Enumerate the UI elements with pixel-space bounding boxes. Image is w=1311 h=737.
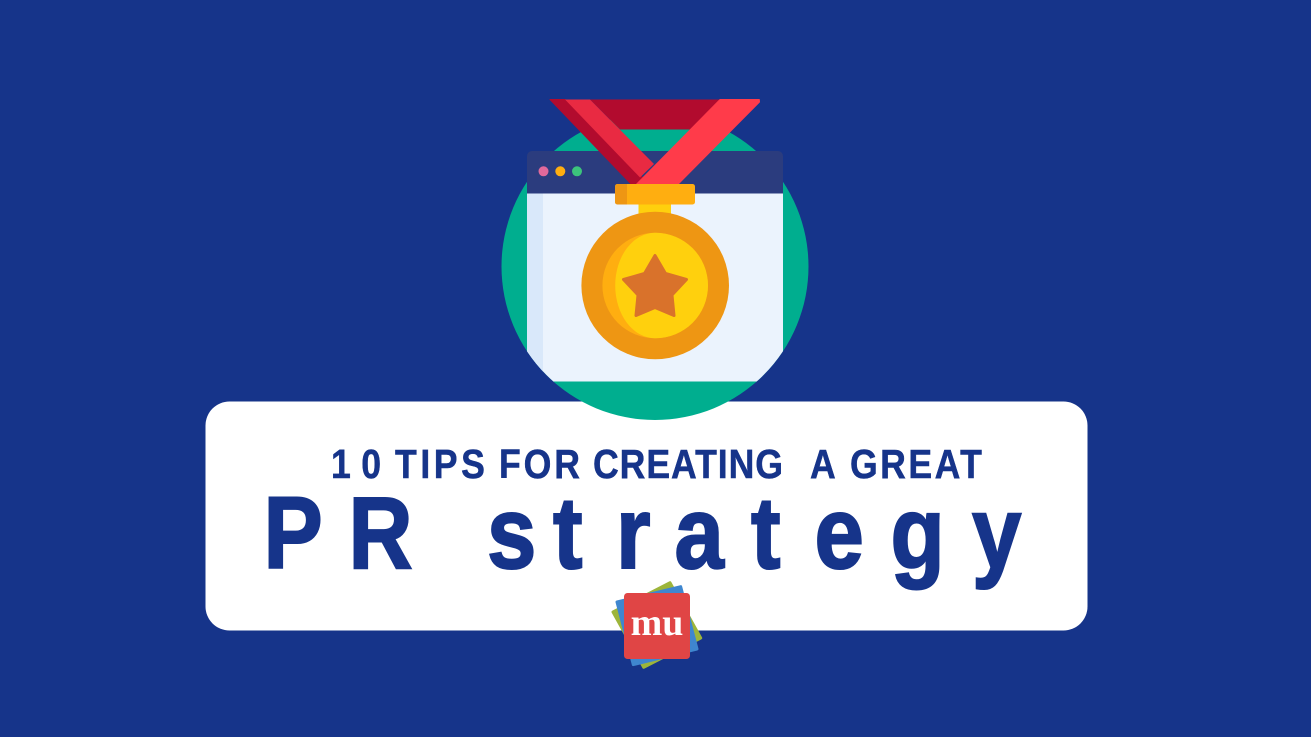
heading: PR strategy: PRstrategy <box>264 476 1021 590</box>
icon: teal circle <box>502 113 808 420</box>
logo: mu stacked cards: mu <box>631 602 683 644</box>
heading: 10 tips line: A <box>810 442 836 488</box>
heading: 10 tips line: GREAT <box>850 442 982 488</box>
heading: 10 tips line: 10 <box>331 442 381 488</box>
medal disc <box>581 212 729 359</box>
heading: 10 tips line: TIPS <box>395 442 485 488</box>
heading: 10 tips line: CREATING <box>593 442 783 488</box>
heading: 10 tips line <box>331 442 982 488</box>
icon: browser window <box>527 151 783 382</box>
medal ribbon <box>550 100 760 185</box>
panel: white title card <box>206 402 1088 630</box>
icon: medal <box>550 100 760 359</box>
heading: 10 tips line: FOR <box>499 442 580 488</box>
logo: mu stacked cards <box>613 583 701 667</box>
medal clasp <box>615 184 695 217</box>
